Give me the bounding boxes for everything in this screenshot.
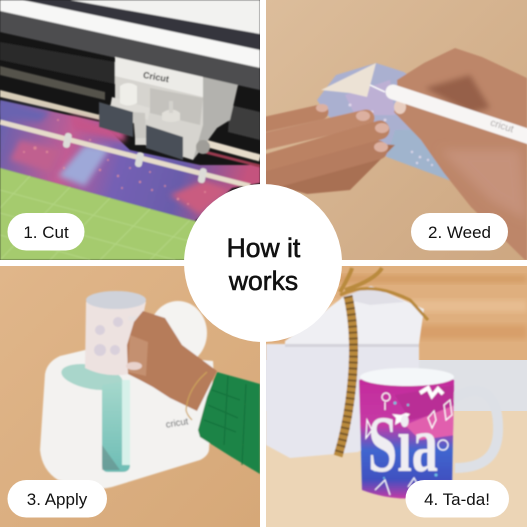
panel: step 4 ta-da (266, 266, 527, 527)
panel: step 1 cut (0, 0, 260, 260)
mug in hand (85, 291, 146, 375)
right hand (394, 48, 527, 260)
mug with Sia design (359, 368, 498, 498)
brand text on press: cricut (165, 416, 190, 431)
printed material (0, 100, 260, 221)
label: 3. Apply: 3. Apply (27, 490, 88, 509)
label: 3. Apply (8, 480, 107, 518)
mug press (40, 350, 213, 489)
vinyl sheet (316, 62, 450, 181)
label: 2. Weed (411, 213, 508, 250)
panel: step 3 apply (0, 266, 260, 527)
brand text on carriage: Cricut (142, 70, 170, 84)
center circle: works (228, 266, 298, 296)
panel: step 2 weed (262, 0, 527, 260)
weeding tool (370, 85, 527, 137)
Sia lettering: Sia (368, 400, 438, 489)
green cutting mat (0, 167, 196, 260)
label: 1. Cut (8, 213, 84, 250)
rail with clips (0, 122, 260, 186)
cutting machine body (0, 0, 260, 140)
brand text on tool: cricut (489, 118, 515, 135)
center circle (184, 184, 342, 342)
label: 1. Cut: 1. Cut (23, 223, 69, 242)
label: 4. Ta-da! (406, 480, 509, 518)
cutting carriage (99, 57, 238, 160)
heading: How it (227, 233, 301, 263)
label: 2. Weed: 2. Weed (428, 223, 491, 242)
left hand (262, 104, 395, 194)
twine ribbon (338, 268, 428, 456)
hand and bracelet (126, 311, 217, 420)
label: 4. Ta-da!: 4. Ta-da! (424, 490, 490, 509)
green sweater cuff (198, 372, 260, 474)
gift box (266, 286, 424, 458)
press lid (154, 300, 208, 358)
